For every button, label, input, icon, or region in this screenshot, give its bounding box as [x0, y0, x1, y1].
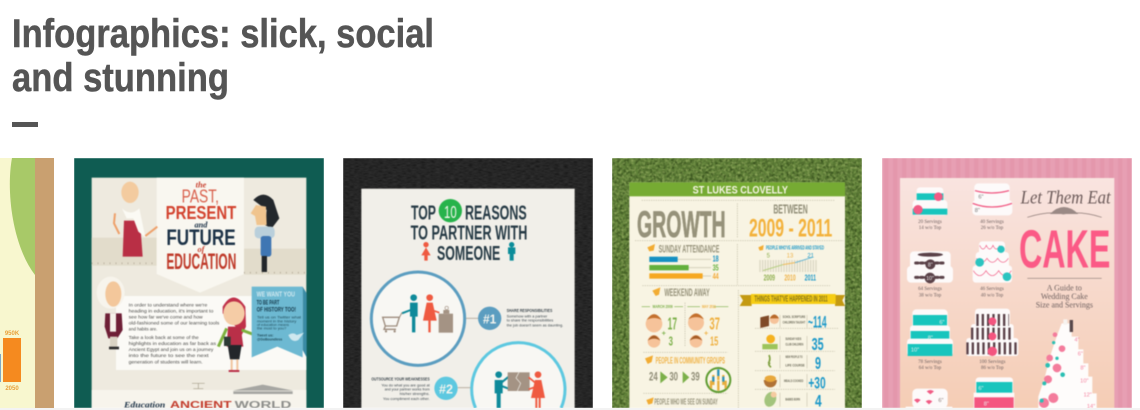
title banner: FUTURE — [166, 225, 236, 250]
reason two text: You compliment each other. — [383, 397, 430, 401]
sunday attendance: SUNDAY ATTENDANCE — [659, 243, 719, 255]
title banner: of — [198, 245, 206, 254]
reason two text: OUTSOURCE YOUR WEAKNESSES — [371, 376, 430, 382]
intro white panel: In order to understand where we're — [129, 302, 208, 307]
cake 5: 6" — [939, 320, 945, 326]
things happened ribbon — [740, 294, 845, 306]
cake 3: 38 w/o Top — [919, 294, 942, 299]
reason one text: the job doesn't seem as daunting. — [507, 323, 563, 327]
title banner: and — [195, 220, 208, 229]
intro white panel: heading in education, it's important to — [129, 308, 214, 313]
cake 2: 8" — [975, 208, 980, 214]
community groups: 24 — [649, 370, 658, 384]
reason two text — [371, 376, 430, 401]
callout: we want you: of education means — [257, 323, 289, 327]
cake 1: 14 w/o Top — [919, 226, 942, 231]
heading: Let Them Eat — [1020, 187, 1111, 208]
people who arrived chart: 2009 — [764, 273, 775, 283]
heading: REASONS — [465, 202, 527, 224]
cake 7 — [906, 389, 952, 408]
figure: bald philosopher — [114, 182, 157, 257]
community groups: 30 — [669, 370, 678, 384]
section heading: education in ancient world — [92, 385, 306, 410]
tall wedding cake: 12" — [1084, 393, 1092, 399]
panel: past present future of education — [74, 158, 324, 410]
reason two text: his/her strengths. — [400, 392, 430, 396]
intro white panel — [116, 296, 306, 370]
callout: we want you: moment in the history — [257, 319, 297, 323]
stats list: BABIES BORN — [785, 397, 800, 401]
stats list: CLUB CHILDREN — [785, 343, 804, 347]
people who arrived chart — [758, 245, 824, 283]
stats list: LIFE COURSE — [785, 363, 805, 367]
title: Infographics: slick, social — [12, 12, 434, 56]
section heading: education in ancient world: Education — [123, 399, 166, 409]
bar value: 950K — [5, 331, 20, 337]
stats list: 35 — [812, 334, 824, 354]
callout: we want you: WE WANT YOU — [257, 292, 295, 299]
callout: we want you: Tell us on Twitter what — [257, 316, 301, 320]
weekend away: MARCH 2009 — [653, 304, 673, 309]
title dash — [12, 122, 38, 127]
tall wedding cake: 10" — [1080, 379, 1088, 385]
stats list: NEW PEOPLE TO — [785, 355, 803, 359]
people on sunday — [646, 397, 718, 407]
cake 2: 40 Servings — [980, 220, 1004, 225]
weekend away: 37 — [709, 313, 720, 333]
weekend away: + — [662, 328, 666, 337]
things happened ribbon: THINGS THAT'VE HAPPENED IN 2011 — [754, 295, 828, 304]
cake 5: 78 Servings — [918, 360, 942, 365]
intro white panel: and habits are. — [129, 327, 157, 332]
cake 6 — [966, 309, 1018, 371]
intro white panel: old-fashioned some of our learning tools — [129, 321, 220, 326]
stats list: +30 — [808, 374, 826, 393]
stats list: MEALS COOKED — [784, 379, 804, 383]
cake 1: 20 Servings — [918, 220, 942, 225]
reason one text: to share the responsibilities — [507, 319, 554, 323]
people who arrived chart: 2011 — [805, 273, 816, 283]
cake 4 — [973, 241, 1012, 299]
panel: st lukes clovelly growth — [612, 158, 862, 410]
cake 5: 10" — [911, 348, 919, 354]
heading: SOMEONE — [437, 243, 500, 265]
growth heading: GROWTH — [637, 203, 726, 245]
weekend away: MAY 2011 — [702, 304, 716, 309]
stats list: 9 — [815, 353, 821, 373]
dividers — [635, 200, 843, 393]
orange bar — [3, 338, 21, 382]
badge #1: #1 — [483, 311, 497, 326]
callout: we want you: TO BE PART — [257, 299, 279, 306]
timeline marker — [192, 383, 205, 389]
panel: top 10 reasons to partner — [343, 158, 593, 408]
tall wedding cake: 6" — [1078, 352, 1083, 358]
callout: we want you: the most to you? — [257, 327, 287, 331]
ruler marks — [92, 263, 306, 273]
heading — [1019, 187, 1111, 310]
green header: ST LUKES CLOVELLY — [693, 185, 788, 197]
intro white panel: Ancient Egypt and join us on a journey — [129, 347, 214, 352]
cake 8: 8" — [984, 401, 989, 407]
bottom page strip — [0, 408, 1140, 410]
reason one text: SHARE RESPONSIBILITIES — [507, 308, 553, 314]
heading: TOP — [411, 202, 436, 224]
cake 2: 6" — [978, 195, 984, 201]
intro white panel: Take a look back at some of the — [129, 335, 199, 340]
weekend away: 17 — [668, 313, 677, 333]
reason one text: Somehow with a partner — [507, 314, 548, 318]
title banner: PAST, — [182, 186, 219, 207]
weekend away: + — [704, 328, 708, 337]
panel: let them eat cake — [882, 158, 1132, 410]
callout: we want you — [252, 287, 307, 357]
sunday attendance: 18 — [713, 255, 719, 264]
circle two illustration — [472, 343, 565, 408]
cake 1 — [913, 187, 947, 231]
bar year: 2050 — [5, 386, 19, 392]
cake 3: 64 Servings — [918, 287, 942, 292]
figure: wigged gentleman — [97, 277, 125, 349]
between years: BETWEEN — [773, 202, 808, 216]
tall wedding cake: 4" — [1074, 338, 1080, 344]
weekend away: 15 — [710, 333, 719, 348]
title banner: EDUCATION — [166, 249, 236, 274]
title banner — [157, 178, 244, 293]
badge #2 — [434, 377, 471, 400]
cake 8 — [974, 377, 1014, 408]
stats list: 4 — [815, 391, 822, 410]
heading: TO PARTNER WITH — [411, 223, 527, 245]
stats list: CHILDREN TAUGHT — [783, 321, 806, 325]
community groups: 39 — [691, 370, 700, 384]
intro white panel: see how far we've come and how — [129, 315, 204, 320]
green arc — [10, 158, 35, 275]
tall wedding cake: 8" — [1080, 365, 1086, 371]
heading: A Guide to — [1047, 283, 1082, 292]
stats list: SCHOL SCRIPTURE — [783, 315, 806, 319]
people who arrived chart: 13 — [787, 254, 794, 260]
sunday attendance — [647, 243, 719, 281]
cake 6: 86 w/o Top — [981, 366, 1004, 371]
title second line: and stunning — [12, 56, 229, 100]
heading: Size and Servings — [1036, 301, 1093, 310]
heading: 10 — [444, 202, 457, 222]
intro white panel: into the future to see the next — [129, 353, 210, 358]
sunday attendance: 35 — [713, 263, 719, 272]
figure: renaissance woman — [251, 195, 279, 272]
cake 6: 100 Servings — [979, 360, 1005, 365]
reason one text — [507, 308, 563, 327]
cake 5: 64 w/o Top — [919, 366, 942, 371]
circle one illustration — [371, 272, 465, 365]
people who arrived chart: 2010 — [784, 273, 796, 283]
between years — [748, 204, 833, 238]
callout: we want you: OF HISTORY TOO! — [257, 307, 296, 314]
green header — [629, 182, 845, 197]
panel: st lukes clovelly growth: PEOPLE IN COMMUNITY GROUPS — [656, 355, 725, 365]
heading: Wedding Cake — [1041, 292, 1088, 301]
stats list — [760, 313, 827, 410]
between years: 2009 - 2011 — [749, 215, 833, 242]
people who arrived chart: PEOPLE WHO'VE ARRIVED AND STAYED — [766, 245, 824, 251]
heading — [411, 199, 527, 265]
intro white panel: highlights in education as far back as — [129, 341, 217, 346]
community groups — [645, 355, 730, 392]
weekend away: 3 — [669, 333, 673, 348]
weekend away: WEEKEND AWAY — [664, 287, 710, 299]
cake 3 — [907, 251, 953, 299]
callout: we want you: @GoBoundless — [257, 337, 283, 341]
cake 5: 8" — [928, 335, 933, 341]
cake 5 — [907, 309, 953, 371]
cake 8: 6" — [978, 386, 984, 392]
cake 3: 10" — [926, 276, 934, 282]
blue bar edge — [0, 354, 1, 382]
sunday attendance: 44 — [713, 272, 719, 281]
stats list: ~114 — [808, 313, 827, 332]
panel: st lukes clovelly growth: PEOPLE WHO WE SEE ON SUNDAY — [654, 397, 718, 407]
reason two text: You do what you are good at — [381, 383, 430, 387]
reason two text: and your partner works from — [385, 388, 430, 392]
people who arrived chart: 21 — [807, 254, 815, 260]
cake 4: 46 Servings — [980, 287, 1004, 292]
weekend away — [642, 287, 728, 348]
badge #1 — [466, 307, 501, 330]
stats list: SUNDAY KIDS — [785, 337, 802, 341]
tan side strip — [35, 158, 54, 408]
panel: partial population infographic — [0, 158, 54, 408]
title banner: PRESENT — [166, 202, 237, 223]
title banner: the — [196, 181, 207, 190]
cake 3: 8" — [928, 262, 933, 268]
intro white panel: generation of students will learn. — [129, 359, 203, 364]
cake 2: 26 w/o Top — [981, 226, 1004, 231]
tall wedding cake — [1038, 319, 1097, 410]
people who arrived chart: 5 — [767, 254, 771, 260]
cake 4: 40 w/o Top — [981, 294, 1004, 299]
cake 7: 6" — [938, 398, 944, 404]
badge #2: #2 — [439, 381, 453, 396]
callout: we want you: Tweet us: — [257, 334, 274, 338]
figure: red haired teacher — [218, 297, 255, 372]
cake 2 — [972, 183, 1012, 231]
tall wedding cake: 14" — [1087, 404, 1095, 410]
